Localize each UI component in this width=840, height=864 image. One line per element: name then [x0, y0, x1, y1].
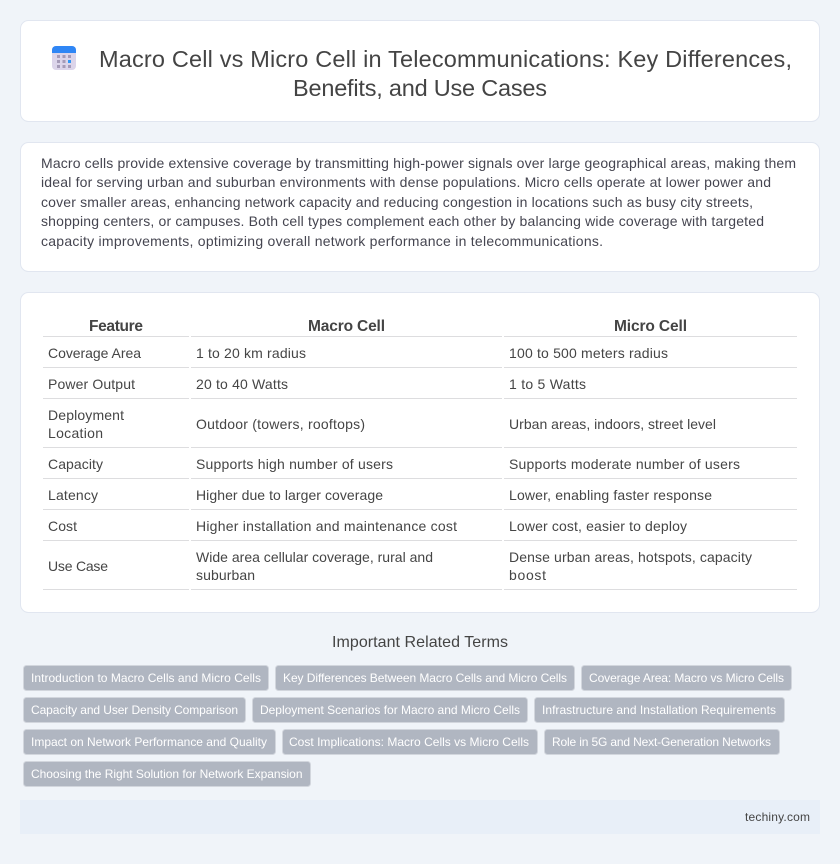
tag [252, 698, 528, 722]
tag [24, 698, 246, 722]
table row: use case [43, 549, 797, 590]
table row: coverage area [43, 345, 797, 368]
tag [276, 666, 574, 690]
table row: deployment location: Outdoor (towers, rooftops) [196, 416, 365, 432]
table row: power output: Power Output [48, 376, 135, 392]
table row: capacity: Supports high number of users [196, 456, 393, 472]
table header row [43, 318, 797, 337]
table row: latency: Higher due to larger coverage [196, 487, 383, 503]
tag: Key Differences Between Macro Cells and Micro Cells [283, 671, 567, 685]
tag [24, 730, 276, 754]
table row: coverage area: 1 to 20 km radius [196, 345, 306, 361]
table row: use case: suburban [196, 567, 255, 583]
tag: Cost Implications: Macro Cells vs Micro Cells [289, 735, 529, 749]
table row: power output: 20 to 40 Watts [196, 376, 288, 392]
tag [534, 698, 784, 722]
table row: latency: Latency [48, 487, 98, 503]
tag [24, 666, 268, 690]
tag [582, 666, 792, 690]
icon: calendar grid [52, 46, 76, 70]
title: Benefits, and Use Cases [293, 75, 547, 101]
tag: Role in 5G and Next-Generation Networks [552, 735, 771, 749]
text block: introduction: Macro cells provide extensive coverage by transmitting high-power signals over large geographical areas, making them [41, 155, 796, 171]
table row: deployment location: Location [48, 425, 103, 441]
table row: deployment location: Deployment [48, 407, 124, 423]
tag [24, 762, 310, 786]
table row: use case: Dense urban areas, hotspots, capacity [509, 549, 752, 565]
table row: latency [43, 487, 797, 510]
tag [544, 730, 780, 754]
table row: deployment location [43, 407, 797, 448]
tag: Impact on Network Performance and Quality [31, 735, 267, 749]
text block: introduction: cover smaller areas, enhancing network capacity and reducing congestion in locations such as busy city streets, [41, 194, 753, 210]
table row: capacity: Capacity [48, 456, 103, 472]
text block: introduction: shopping centers, or campuses. Both cell types complement each other by balancing wide coverage with targeted [41, 213, 764, 229]
panel: comparison table [20, 292, 820, 612]
table row: coverage area: Coverage Area [48, 345, 141, 361]
footer bar [20, 800, 820, 834]
table header row: Micro Cell [614, 318, 687, 335]
title [99, 46, 792, 101]
tag: Introduction to Macro Cells and Micro Cells [31, 671, 261, 685]
footer site name: techiny.com [745, 810, 810, 824]
table row: use case: Wide area cellular coverage, rural and [196, 549, 433, 565]
table row: cost: Cost [48, 518, 77, 534]
tag: Choosing the Right Solution for Network Expansion [31, 767, 302, 781]
table row: power output [43, 376, 797, 399]
text block: introduction [41, 155, 796, 249]
table header row: Macro Cell [308, 318, 385, 335]
title: Macro Cell vs Micro Cell in Telecommunications: Key Differences, [99, 46, 792, 72]
table header row: Feature [89, 318, 143, 335]
table row: use case: boost [509, 567, 546, 583]
tag: Coverage Area: Macro vs Micro Cells [589, 671, 784, 685]
table row: cost: Higher installation and maintenance cost [196, 518, 457, 534]
table row: cost [43, 518, 797, 541]
table row: power output: 1 to 5 Watts [509, 376, 586, 392]
tag [282, 730, 538, 754]
table row: coverage area: 100 to 500 meters radius [509, 345, 668, 361]
table row: cost: Lower cost, easier to deploy [509, 518, 687, 534]
tag: Capacity and User Density Comparison [31, 703, 238, 717]
table row: capacity: Supports moderate number of users [509, 456, 740, 472]
panel: related term tags [24, 666, 792, 786]
panel: introduction paragraph [20, 142, 820, 272]
table row: capacity [43, 456, 797, 479]
header panel [20, 20, 820, 122]
text block: introduction: ideal for serving urban and suburban environments with dense populations. Micro cells operate at lower power and [41, 174, 771, 190]
table row: use case: Use Case [48, 558, 108, 574]
table row: deployment location: Urban areas, indoors, street level [509, 416, 716, 432]
heading: important related terms: Important Related Terms [332, 634, 508, 651]
table row: latency: Lower, enabling faster response [509, 487, 712, 503]
tag: Infrastructure and Installation Requirements [542, 703, 776, 717]
text block: introduction: capacity improvements, optimizing overall network performance in telecommunications. [41, 233, 603, 249]
tag: Deployment Scenarios for Macro and Micro Cells [260, 703, 520, 717]
